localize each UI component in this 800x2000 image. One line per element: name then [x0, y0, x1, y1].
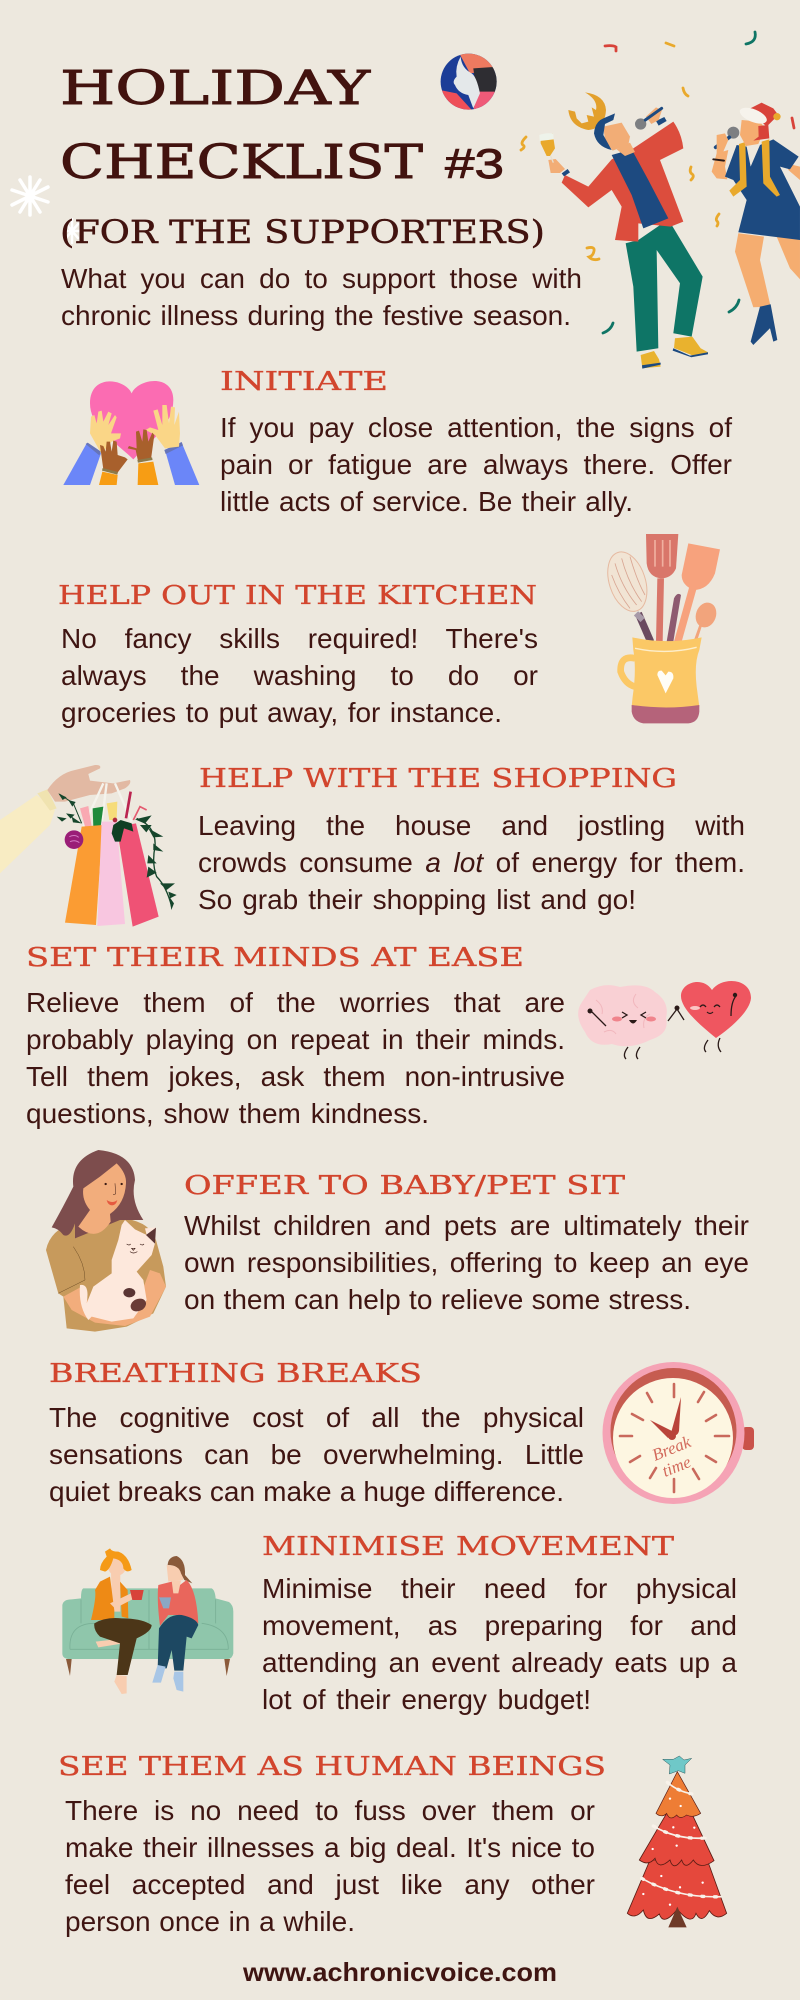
body text: probably playing on repeat in their minds. [26, 1024, 565, 1055]
clock label: Break [649, 1432, 694, 1465]
body text: feel accepted and just like any other [65, 1869, 595, 1900]
singer with santa hat [712, 103, 800, 345]
icon: snowflakes [12, 177, 80, 243]
body text: person once in a while. [65, 1906, 355, 1937]
confetti [521, 32, 794, 333]
body text [65, 1792, 600, 1940]
singer with antlers [539, 92, 708, 369]
heading: SEE THEM AS HUMAN BEINGS [58, 1752, 606, 1782]
body text: sensations can be overwhelming. Little [49, 1439, 584, 1470]
body text [184, 1207, 754, 1318]
body text: movement, as preparing for and [262, 1610, 737, 1641]
panel: help out in the kitchen [58, 534, 720, 731]
body text [262, 1570, 742, 1718]
icon: christmas tree [627, 1756, 727, 1927]
illustration: two friends on a sofa [62, 1548, 233, 1694]
intro text: What you can do to support those with [61, 263, 582, 294]
illustration: two people singing with confetti [521, 32, 800, 369]
body text: lot of their energy budget! [262, 1684, 591, 1715]
body text: Relieve them of the worries that are [26, 987, 565, 1018]
panel: help with the shopping [0, 764, 750, 927]
heading: HELP WITH THE SHOPPING [199, 764, 677, 794]
body text [26, 984, 568, 1132]
body text: Whilst children and pets are ultimately their [184, 1210, 749, 1241]
intro text: chronic illness during the festive season. [61, 300, 571, 331]
body text: groceries to put away, for instance. [61, 697, 502, 728]
body text [198, 807, 750, 918]
body text: questions, show them kindness. [26, 1098, 429, 1129]
body text: The cognitive cost of all the physical [49, 1402, 584, 1433]
heading: BREATHING BREAKS [49, 1359, 422, 1389]
icon: break time clock [602, 1362, 754, 1504]
heading: MINIMISE MOVEMENT [262, 1532, 675, 1562]
body text [61, 620, 541, 731]
illustration: woman holding cat [46, 1150, 166, 1332]
body text: own responsibilities, offering to keep an eye [184, 1247, 749, 1278]
heading: OFFER TO BABY/PET SIT [184, 1171, 626, 1201]
title line 2: CHECKLIST [60, 135, 423, 190]
body text: crowds consume a lot of energy for them. [198, 847, 745, 878]
subtitle: (FOR THE SUPPORTERS) [60, 213, 545, 251]
body text: little acts of service. Be their ally. [220, 486, 633, 517]
icon: mug with utensils [601, 534, 720, 723]
panel: offer to baby/pet sit [46, 1150, 754, 1332]
body text: make their illnesses a big deal. It's nice to [65, 1832, 595, 1863]
intro text [61, 260, 591, 334]
heading: HELP OUT IN THE KITCHEN [58, 581, 537, 611]
body text: always the washing to do or [61, 660, 538, 691]
body text: There is no need to fuss over them or [65, 1795, 595, 1826]
body text: If you pay close attention, the signs of [220, 412, 732, 443]
panel: breathing breaks [49, 1359, 754, 1510]
panel: set their minds at ease [26, 943, 751, 1132]
body text: So grab their shopping list and go! [198, 884, 636, 915]
icon: brand logo [440, 53, 498, 112]
heading: SET THEIR MINDS AT EASE [26, 943, 524, 973]
body text: Minimise their need for physical [262, 1573, 737, 1604]
website footer: www.achronicvoice.com [242, 1957, 557, 1987]
title line 1: HOLIDAY [60, 61, 371, 116]
body text: on them can help to relieve some stress. [184, 1284, 691, 1315]
clock label: time [659, 1452, 694, 1481]
icon: hand holding shopping bags [0, 765, 177, 927]
body text [49, 1399, 589, 1510]
body text: No fancy skills required! There's [61, 623, 538, 654]
body text: attending an event already eats up a [262, 1647, 737, 1678]
panel: see them as human beings [58, 1752, 727, 1940]
icon: happy brain and heart [578, 981, 751, 1059]
tree topper star [663, 1756, 692, 1774]
body text [220, 409, 740, 520]
icon: heart and hands [63, 381, 199, 485]
body text: pain or fatigue are always there. Offer [220, 449, 732, 480]
panel: initiate [63, 367, 740, 520]
title block [60, 61, 545, 251]
title number: #3 [445, 140, 504, 187]
body text: Tell them jokes, ask them non-intrusive [26, 1061, 565, 1092]
body text: quiet breaks can make a huge difference. [49, 1476, 564, 1507]
body text: Leaving the house and jostling with [198, 810, 745, 841]
heading: INITIATE [220, 367, 388, 397]
panel: minimise movement [62, 1532, 742, 1718]
